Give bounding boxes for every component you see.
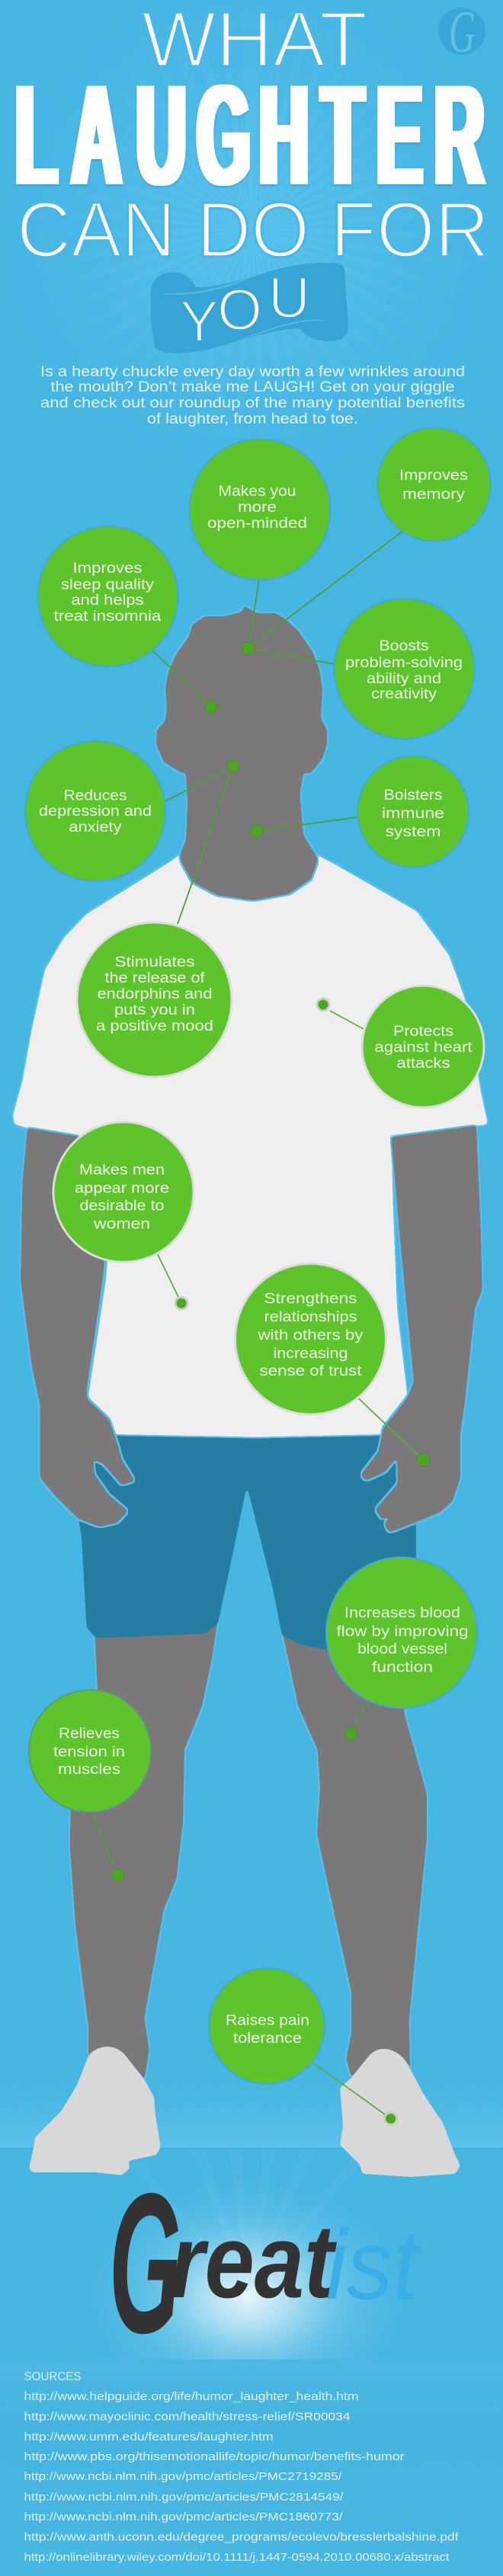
marker dots xyxy=(111,641,430,2125)
callout: problem-solving: Boosts xyxy=(380,638,428,654)
head and neck xyxy=(156,606,327,900)
callout: muscles: tension in xyxy=(53,1744,125,1760)
callout: depression: Reduces xyxy=(64,788,127,804)
callout: heart attacks: against heart xyxy=(375,1040,473,1056)
logo: Greatist: reat xyxy=(170,2204,338,2320)
callout: pain tolerance xyxy=(209,1968,325,2084)
callout: open-minded xyxy=(189,439,331,580)
panel: logo section background xyxy=(0,2148,503,2360)
connector lines xyxy=(93,532,424,2119)
callout: depression xyxy=(25,741,165,881)
logo: Greatist: G xyxy=(109,2153,181,2375)
logo: Greatist: ist xyxy=(326,2209,422,2320)
sources list: http://www.anth.uconn.edu/degree_programs/ecolevo/bresslerbalshine.pdf xyxy=(24,2530,459,2544)
callout: memory: Improves xyxy=(399,468,468,484)
callout: relationships: relationships xyxy=(264,1309,357,1325)
text block: introduction: of laughter, from head to toe. xyxy=(147,411,358,427)
icon: Greatist G badge xyxy=(438,0,485,66)
callout: endorphins: the release of xyxy=(105,970,205,986)
callout: sleep: Improves xyxy=(73,561,142,577)
t-shirt xyxy=(13,855,488,1437)
title line: LAUGHTER: LAUGHTER xyxy=(15,56,484,216)
sources list: http://www.ncbi.nlm.nih.gov/pmc/articles/PMC2814549/ xyxy=(24,2491,344,2504)
icon: Greatist G badge: G xyxy=(449,0,476,66)
callout: muscles: Relieves xyxy=(59,1726,120,1742)
fade band above logo section xyxy=(0,2057,503,2148)
panel: sources background xyxy=(0,2360,503,2576)
callout: sleep: treat insomnia xyxy=(53,609,162,625)
left shoe xyxy=(29,2047,160,2175)
sources list xyxy=(24,2370,459,2564)
callout: blood flow xyxy=(326,1557,477,1708)
sources list: http://www.ncbi.nlm.nih.gov/pmc/articles/PMC1860773/ xyxy=(24,2510,343,2523)
callout: endorphins: a positive mood xyxy=(96,1018,213,1034)
callout: immune: Bolsters xyxy=(384,788,442,804)
callout: depression: anxiety xyxy=(69,820,122,836)
callout: blood flow: Increases blood xyxy=(344,1606,460,1621)
callout: pain tolerance: Raises pain xyxy=(226,2012,309,2029)
left arm and hand xyxy=(21,1128,135,1526)
text block: introduction xyxy=(40,364,465,427)
callout: desirable: appear more xyxy=(75,1181,169,1197)
text block: introduction: the mouth? Don’t make me LAUGH! Get on your giggle xyxy=(50,379,454,395)
callout: heart attacks xyxy=(362,986,484,1107)
illustration: man silhouette xyxy=(13,606,488,2177)
callout: sleep xyxy=(38,526,178,666)
callout: problem-solving xyxy=(334,599,474,739)
callout: open-minded: open-minded xyxy=(207,516,307,532)
callout: open-minded: Makes you xyxy=(218,484,296,500)
callout: heart attacks: Protects xyxy=(393,1024,453,1040)
shorts xyxy=(78,1434,416,1650)
callout: immune xyxy=(357,756,469,867)
callout: problem-solving: problem-solving xyxy=(345,655,463,671)
callout: depression: depression and xyxy=(39,804,152,820)
callout: endorphins xyxy=(77,922,232,1077)
sources list: http://onlinelibrary.wiley.com/doi/10.1111/j.1447-0594.2010.00680.x/abstract xyxy=(24,2551,450,2564)
callout: muscles xyxy=(29,1690,151,1812)
callout: memory: memory xyxy=(402,487,466,503)
title xyxy=(15,0,489,273)
sources list: http://www.umm.edu/features/laughter.htm xyxy=(24,2431,273,2443)
callout: sleep: and helps xyxy=(72,593,143,609)
callout: open-minded: more xyxy=(238,500,277,516)
callout: memory xyxy=(377,428,491,541)
callout: relationships xyxy=(235,1264,386,1414)
callout: immune: system xyxy=(386,824,441,840)
banner word: YOU: YOU xyxy=(180,266,310,354)
callout: blood flow: flow by improving xyxy=(337,1624,468,1640)
text block: introduction: and check out our roundup of the many potential benefits xyxy=(40,395,465,411)
callout: relationships: with others by xyxy=(257,1328,364,1344)
callout: desirable: Makes men xyxy=(79,1162,165,1178)
callout: blood flow: blood vessel xyxy=(357,1641,447,1657)
callout: relationships: sense of trust xyxy=(259,1363,362,1379)
sources list: http://www.pbs.org/thisemotionallife/topic/humor/benefits-humor xyxy=(24,2450,404,2463)
callout: desirable: women xyxy=(93,1216,150,1232)
text block: introduction: Is a hearty chuckle every day worth a few wrinkles around xyxy=(40,364,465,380)
right arm and hand xyxy=(361,1126,482,1532)
callout: muscles: muscles xyxy=(58,1762,120,1778)
sources list: http://www.mayoclinic.com/health/stress-relief/SR00034 xyxy=(24,2410,351,2424)
callout: endorphins: puts you in xyxy=(114,1002,195,1018)
callout: blood flow: function xyxy=(372,1660,433,1676)
callout: pain tolerance: tolerance xyxy=(233,2031,302,2047)
sources list: http://www.helpguide.org/life/humor_laughter_health.htm xyxy=(24,2390,358,2403)
title line: CAN DO FOR: CAN DO FOR xyxy=(17,186,489,273)
legs xyxy=(70,1619,427,2079)
sources heading: SOURCES xyxy=(24,2370,81,2383)
sources list: http://www.ncbi.nlm.nih.gov/pmc/articles/PMC2719285/ xyxy=(24,2470,342,2483)
right shoe xyxy=(340,2049,460,2177)
callout: endorphins: Stimulates xyxy=(114,954,195,970)
callout: desirable xyxy=(53,1122,194,1262)
callout: relationships: Strengthens xyxy=(264,1291,357,1307)
callout: desirable: desirable to xyxy=(79,1198,165,1214)
banner: YOU ribbon xyxy=(151,263,348,354)
callout: immune: immune xyxy=(382,806,444,822)
callout: heart attacks: attacks xyxy=(396,1056,450,1072)
callout: sleep: sleep quality xyxy=(61,577,155,593)
callout: problem-solving: ability and xyxy=(367,671,441,687)
logo: Greatist xyxy=(109,2153,422,2375)
callout: endorphins: endorphins and xyxy=(98,986,212,1002)
callout: relationships: increasing xyxy=(273,1346,348,1362)
callout: problem-solving: creativity xyxy=(371,686,437,702)
